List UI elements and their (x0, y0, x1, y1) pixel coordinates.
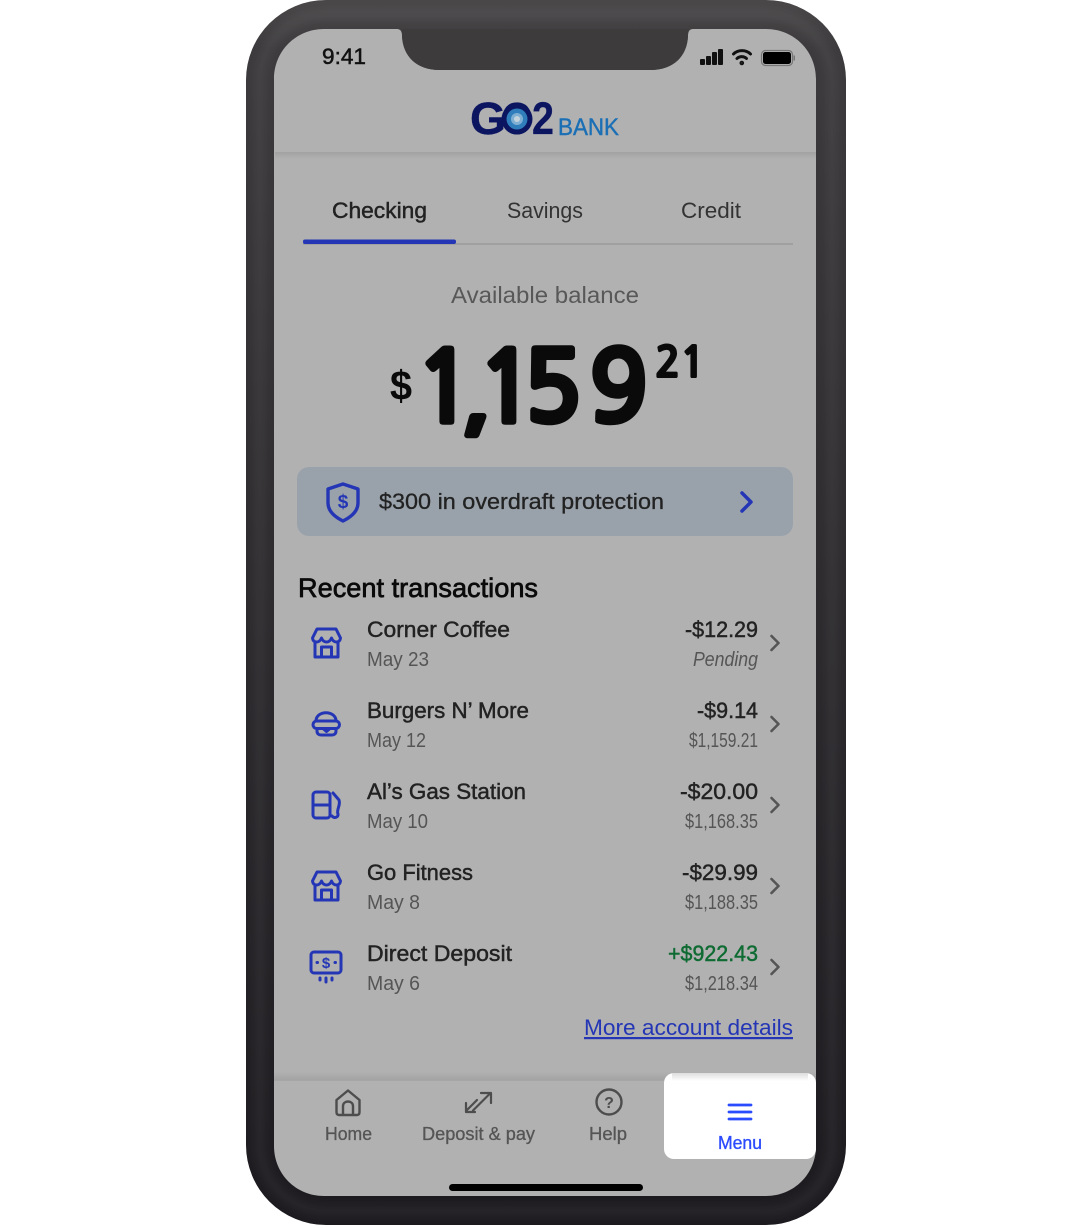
logo: O (501, 93, 533, 144)
nav: menu highlighted (664, 1073, 816, 1159)
icon: arrows (466, 1093, 491, 1112)
nav: deposit and pay (422, 1093, 535, 1144)
heading: recent transactions: Recent transactions (298, 573, 538, 603)
tab: savings: Savings (507, 198, 583, 223)
tab: checking: Checking (332, 198, 427, 223)
transaction: go fitness (312, 860, 778, 914)
icon: fuel pump (313, 792, 339, 818)
transaction: burgers (313, 698, 778, 752)
logo target circle (502, 104, 532, 134)
nav: help (589, 1090, 627, 1144)
transaction: corner coffee: Corner Coffee (367, 617, 510, 642)
icon: shield dollar (328, 484, 358, 521)
transaction: burgers: May 12 (367, 730, 426, 752)
transaction: gas station: $1,168.35 (685, 811, 758, 833)
status bar (322, 44, 795, 69)
transaction: gas station (313, 779, 778, 833)
link: more account details: More account details (584, 1015, 793, 1040)
phone frame (246, 0, 846, 1225)
balance amount: 21 (655, 343, 705, 384)
transaction: go fitness: Go Fitness (367, 860, 473, 885)
battery icon (762, 50, 795, 66)
tabs (303, 198, 793, 245)
nav: help: Help (589, 1124, 627, 1144)
transaction: burgers: -$9.14 (697, 698, 758, 723)
nav: home: Home (325, 1124, 372, 1144)
nav: deposit and pay: Deposit & pay (422, 1124, 535, 1144)
logo: BANK (558, 114, 619, 141)
nav: menu highlighted: Menu (718, 1133, 762, 1153)
available balance label: Available balance (451, 282, 639, 308)
transaction: corner coffee: -$12.29 (685, 617, 758, 642)
transaction: gas station: -$20.00 (680, 779, 758, 804)
balance amount: 1,159 (415, 340, 648, 437)
transaction: corner coffee (312, 617, 778, 671)
transaction: go fitness: -$29.99 (682, 860, 758, 885)
transaction: direct deposit: +$922.43 (668, 941, 758, 966)
transaction: burgers: Burgers N’ More (367, 698, 529, 723)
transaction: direct deposit (311, 941, 778, 995)
icon: burger (313, 713, 340, 735)
icon: hamburger (729, 1105, 751, 1119)
transaction: direct deposit: May 6 (367, 973, 420, 995)
transaction: go fitness: May 8 (367, 892, 420, 914)
transaction: go fitness: $1,188.35 (685, 892, 758, 914)
transaction: corner coffee: Pending (693, 649, 758, 671)
banner text: $300 in overdraft protection (379, 489, 664, 514)
overdraft banner (297, 467, 793, 536)
signal icon (700, 49, 723, 65)
icon: deposit (311, 952, 341, 982)
phone screen (274, 29, 816, 1196)
icon: shield dollar: $ (338, 492, 349, 513)
icon: help circle: ? (604, 1095, 614, 1112)
balance amount: $ (390, 362, 412, 409)
wifi icon (734, 51, 750, 64)
active tab underline (303, 240, 456, 244)
transaction: corner coffee: May 23 (367, 649, 429, 671)
transaction: gas station: Al’s Gas Station (367, 779, 526, 804)
transaction: burgers: $1,159.21 (689, 730, 758, 752)
transaction: direct deposit: Direct Deposit (367, 941, 512, 966)
icon: home (336, 1090, 360, 1115)
tab: credit: Credit (681, 198, 741, 223)
icon: deposit: $ (322, 955, 331, 972)
icon: store (312, 629, 340, 657)
transaction: gas station: May 10 (367, 811, 428, 833)
icon: chevron (742, 493, 751, 511)
logo: 2 (532, 93, 554, 144)
nav: home (325, 1090, 372, 1144)
home indicator (449, 1184, 643, 1191)
logo (470, 93, 619, 144)
transaction: direct deposit: $1,218.34 (685, 973, 758, 995)
logo: G (470, 93, 506, 144)
time: 9:41 (322, 44, 366, 69)
icon: store (312, 872, 340, 900)
